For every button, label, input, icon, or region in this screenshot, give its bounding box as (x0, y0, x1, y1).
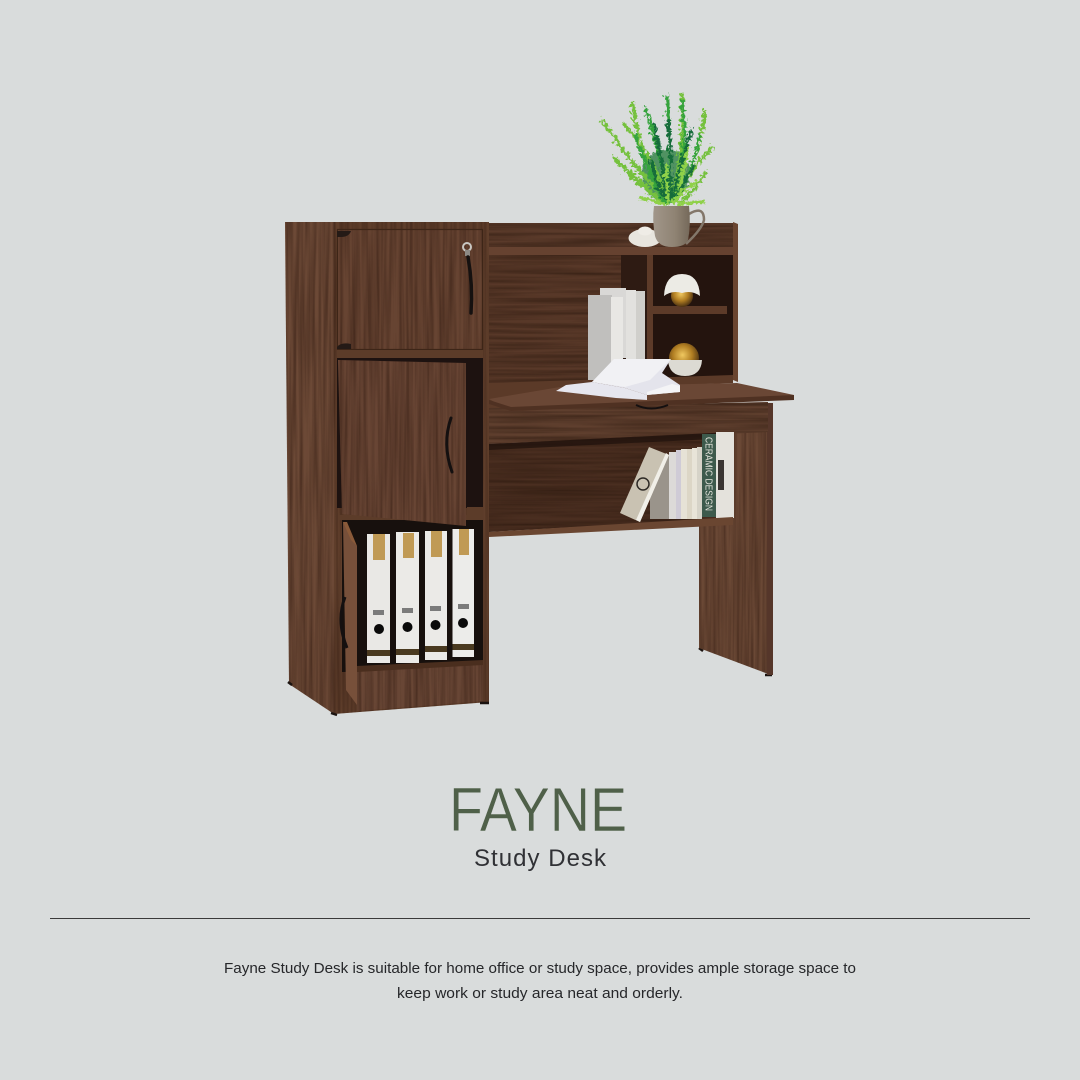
desk: hutch main back panel (489, 255, 623, 390)
plant: dense dark core (639, 146, 687, 198)
desk: hutch shaded back panel (621, 255, 647, 380)
books: row of spines (650, 447, 702, 519)
desk: cabinet shelf (337, 350, 483, 358)
desk: right leg (699, 431, 771, 675)
desk: hutch divider (647, 255, 653, 380)
book: Ceramic Design spine: CERAMIC DESIGN (702, 437, 714, 511)
book: grey cover (588, 295, 612, 380)
desk: binder compartment (342, 520, 483, 672)
desk: lower cabinet shelf edge (338, 515, 483, 520)
plant: mid-green sprigs (631, 91, 697, 200)
desk: hutch small shelf (653, 306, 727, 314)
desk: lower back panel (489, 432, 733, 532)
desk: cabinet base panel (357, 664, 483, 711)
desk: hutch right compartments (653, 255, 733, 380)
binder 3 (425, 531, 447, 660)
desk: right leg front edge (767, 403, 773, 675)
small white vase (628, 226, 662, 247)
icon: key and door handle (463, 243, 472, 313)
plant: dark sprigs (647, 116, 691, 196)
desk: bottom shelf edge (357, 660, 483, 672)
desk: dark compartment behind middle door (337, 358, 483, 508)
books on lower shelf (620, 432, 734, 522)
description line 1: Fayne Study Desk is suitable for home office or study space, provides ample storage space to (224, 961, 856, 977)
book: spine (611, 297, 623, 378)
desk: open lower door edge-on (341, 522, 357, 705)
gold sphere with white cap (664, 274, 700, 307)
desk: upper cabinet door (337, 229, 483, 350)
gold sphere in white bowl (668, 343, 702, 376)
desk: gap filler behind flap (489, 386, 570, 410)
product image: study desk (285, 89, 794, 715)
icon: door handle (447, 418, 452, 472)
binder 4 (452, 529, 474, 657)
plant: light sprigs (598, 89, 710, 200)
desk: hutch side edge (733, 222, 738, 382)
desk: hutch top shelf (489, 247, 733, 255)
divider line (50, 918, 1030, 919)
desk: hutch bottom shelf (489, 375, 733, 392)
book: tilted (620, 447, 669, 522)
icon: flap handle (636, 405, 668, 408)
binders (367, 529, 474, 663)
book: back white (600, 288, 626, 358)
desk: drawer front below flap (489, 402, 768, 444)
desk: lower shelf board (489, 517, 733, 537)
desk: open middle door (338, 360, 466, 526)
ceramic jug (653, 206, 704, 247)
open book (556, 359, 680, 400)
book: white (716, 432, 734, 518)
desk: fold-out flap top (489, 383, 794, 411)
desk: cabinet front frame (334, 222, 489, 714)
binder 1 (367, 534, 390, 663)
desk: feet (288, 648, 772, 715)
binder 2 (396, 532, 419, 663)
description line 2: keep work or study area neat and orderly. (397, 986, 683, 1002)
brand title: FAYNE (449, 776, 627, 845)
desk: small shelf beside door (467, 507, 483, 515)
subtitle: Study Desk (474, 845, 607, 872)
desk: lower shadow (489, 432, 733, 450)
book: spine (636, 291, 645, 361)
plant: bright foreground fronds (637, 146, 701, 201)
book: spine (626, 290, 636, 360)
plant (598, 89, 710, 201)
desk: hutch back board (489, 223, 733, 247)
description text (224, 961, 856, 1002)
desk: flap edge (489, 395, 794, 411)
desk: side panel (285, 222, 334, 714)
books on hutch (588, 288, 645, 380)
